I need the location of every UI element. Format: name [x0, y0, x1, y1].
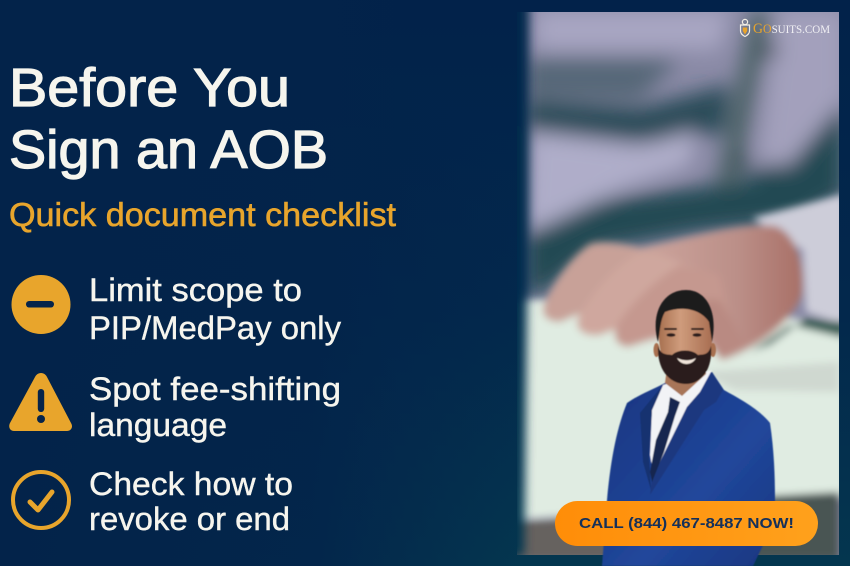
cuff [752, 194, 845, 325]
suit [602, 372, 775, 566]
mouth [677, 358, 696, 364]
bottom of the desk [517, 517, 604, 555]
text: revoke [89, 466, 293, 537]
call to action button [555, 501, 818, 546]
checklist item: limit scope [12, 272, 341, 346]
paper [510, 300, 845, 520]
beard [658, 346, 711, 384]
icon: check circle [13, 472, 69, 528]
shirt [650, 370, 712, 478]
text: fee-shifting [89, 371, 341, 443]
eyes and brows [664, 328, 704, 337]
title: Sign an AOB [9, 120, 328, 180]
right lapel [650, 372, 723, 495]
icon: minus circle [12, 275, 70, 334]
title: Before You [9, 58, 290, 118]
text: fee-shifting: language [89, 407, 227, 443]
icon: lock shield [740, 19, 750, 36]
checklist item: fee-shifting [9, 371, 341, 443]
logo: GoSuits.com [740, 19, 830, 37]
text: limit scope: Limit scope to [89, 272, 302, 308]
title [9, 58, 328, 180]
text: revoke: revoke or end [89, 501, 290, 537]
checklist item: revoke [13, 466, 293, 537]
text: revoke: Check how to [89, 466, 293, 502]
feathered left edge of the photo [517, 12, 537, 555]
hand [640, 225, 803, 360]
ears [654, 343, 716, 357]
text: fee-shifting: Spot fee-shifting [89, 371, 341, 407]
logo wordmark: GOSUITS.COM [753, 21, 830, 37]
subtitle: Quick document checklist [9, 196, 396, 233]
call to action button: CALL (844) 467-8487 NOW! [579, 515, 794, 532]
text: limit scope [89, 272, 341, 346]
hair [656, 290, 714, 342]
left lapel [640, 385, 663, 490]
text: limit scope: PIP/MedPay only [89, 310, 341, 346]
face [659, 304, 712, 382]
attorney portrait [602, 290, 775, 566]
neck [665, 368, 706, 396]
tie [650, 397, 680, 482]
icon: warning triangle [9, 373, 72, 431]
blurred photo: hand signing a document [517, 12, 839, 555]
